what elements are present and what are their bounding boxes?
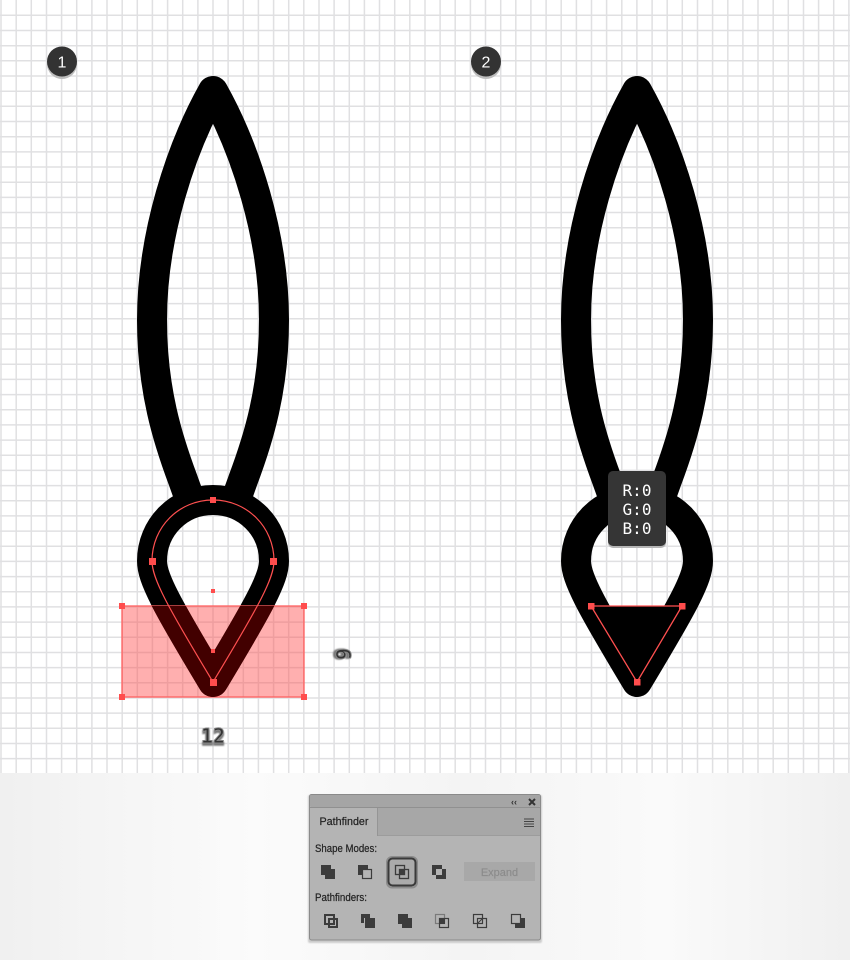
- colour tooltip R G B: [608, 471, 666, 548]
- width label 12: 12: [201, 726, 225, 750]
- red selection rectangle: [122, 606, 304, 697]
- colour tooltip R G B: R:0: [623, 481, 651, 500]
- height label 6: 6: [331, 648, 355, 660]
- shape mode icons: [321, 865, 446, 879]
- colour tooltip R G B: G:0: [623, 500, 651, 519]
- Pathfinder panel: [308, 794, 542, 943]
- intersect triangle result: [588, 603, 686, 686]
- lower drop outline: [152, 500, 274, 682]
- width label 12: 12: [201, 724, 225, 748]
- overlap of selection and stroke: [152, 606, 274, 697]
- colour tooltip R G B: B:0: [623, 519, 651, 538]
- expand button: Expand: [481, 867, 518, 879]
- Pathfinders heading: Pathfinders:: [315, 892, 367, 904]
- selected button highlight: [387, 857, 417, 888]
- tab title: Pathfinder: [320, 816, 369, 828]
- upper leaf outline: [576, 91, 698, 564]
- drop path highlight with anchors: [119, 497, 307, 700]
- height label 6: 6: [329, 648, 353, 660]
- bottom band: [0, 773, 850, 960]
- panel menu icon: [524, 819, 534, 826]
- step badge 1: [47, 46, 77, 79]
- Shape Modes heading: Shape Modes:: [315, 843, 377, 855]
- collapse and close glyphs: ‹‹: [511, 797, 517, 807]
- step badge 2: 2: [482, 54, 491, 72]
- upper leaf outline: [152, 91, 274, 564]
- lower drop outline: [576, 500, 698, 682]
- brush shape, step 1: [152, 91, 274, 682]
- step badge 2: [471, 46, 501, 79]
- pathfinder icons: [325, 914, 525, 928]
- step badge 1: 1: [58, 54, 67, 72]
- expand button: [464, 862, 535, 881]
- brush shape, step 2: [576, 91, 698, 682]
